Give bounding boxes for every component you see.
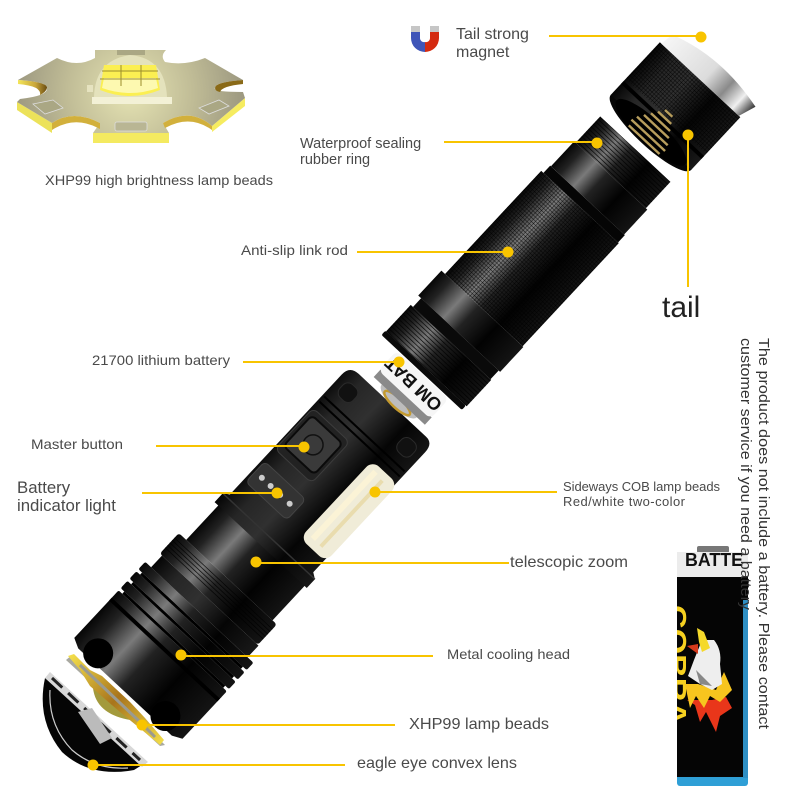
callout: XHP99 lamp beads	[136, 720, 395, 730]
battery indicator lights	[246, 461, 306, 520]
callout: telescopic zoom	[250, 556, 509, 568]
callout: master button	[156, 442, 310, 452]
battery label BATTE: BATTE	[685, 550, 743, 570]
telescopic barrel	[186, 502, 308, 620]
note: battery not included	[737, 338, 772, 730]
label: waterproof sealing rubber ring: Waterproof sealing	[300, 136, 421, 152]
label: tail: tail	[662, 291, 700, 324]
icon: magnet	[411, 26, 439, 52]
callout: COB lamp	[370, 486, 557, 498]
callout lines and dots	[88, 32, 706, 770]
label: XHP99 lamp beads: XHP99 lamp beads	[409, 716, 549, 733]
label: anti-slip link rod: Anti-slip link rod	[241, 242, 348, 258]
label: battery indicator light: Battery	[17, 478, 71, 497]
illustration: eagle eye convex lens	[43, 672, 148, 772]
label: tail strong magnet: magnet	[456, 44, 510, 61]
callout: tail	[682, 130, 694, 287]
label: 21700 lithium battery: 21700 lithium battery	[92, 352, 230, 368]
note: battery not included: customer service if you need a battery	[737, 338, 754, 611]
callout: convex lens	[88, 760, 345, 770]
battery brand COBRA: COBRA	[661, 605, 692, 725]
illustration: lamp bead disc	[66, 654, 165, 746]
label: master button: Master button	[31, 436, 123, 452]
tail cap	[601, 42, 740, 180]
label: sideways COB lamp beads: Sideways COB lamp beads	[563, 479, 720, 494]
label: XHP99 high brightness lamp beads: XHP99 high brightness lamp beads	[45, 172, 273, 188]
illustration: spare battery	[677, 546, 748, 786]
master button	[275, 408, 350, 483]
label: eagle eye convex lens: eagle eye convex lens	[357, 755, 517, 772]
icon: XHP99 lamp bead star plate	[17, 50, 245, 143]
side COB lamp panel	[300, 460, 398, 562]
link rod	[381, 109, 674, 411]
head section with cooling fins	[67, 550, 264, 746]
label: tail strong magnet: Tail strong	[456, 26, 529, 43]
callout: metal cooling head	[176, 650, 433, 660]
callout: indicator light	[142, 488, 282, 498]
label: metal cooling head: Metal cooling head	[447, 646, 570, 662]
label: telescopic zoom: telescopic zoom	[510, 554, 628, 571]
knurled zoom ring	[160, 533, 277, 645]
eagle emblem	[685, 628, 732, 732]
main body	[215, 362, 438, 588]
battery white ring	[367, 351, 449, 431]
battery ring lettering: OM BAT	[381, 353, 446, 415]
callout: anti-slip rod	[357, 246, 514, 258]
callout: waterproof ring	[444, 138, 602, 148]
callout: battery	[243, 356, 404, 368]
callout: tail strong magnet	[549, 32, 706, 42]
label: battery indicator light: indicator light	[17, 496, 116, 515]
label: sideways COB lamp beads: Red/white two-color	[563, 494, 686, 509]
label: waterproof sealing rubber ring: rubber ring	[300, 152, 370, 168]
tail magnet disc	[661, 26, 760, 120]
note: battery not included: The product does not include a battery. Please contact	[755, 338, 772, 730]
